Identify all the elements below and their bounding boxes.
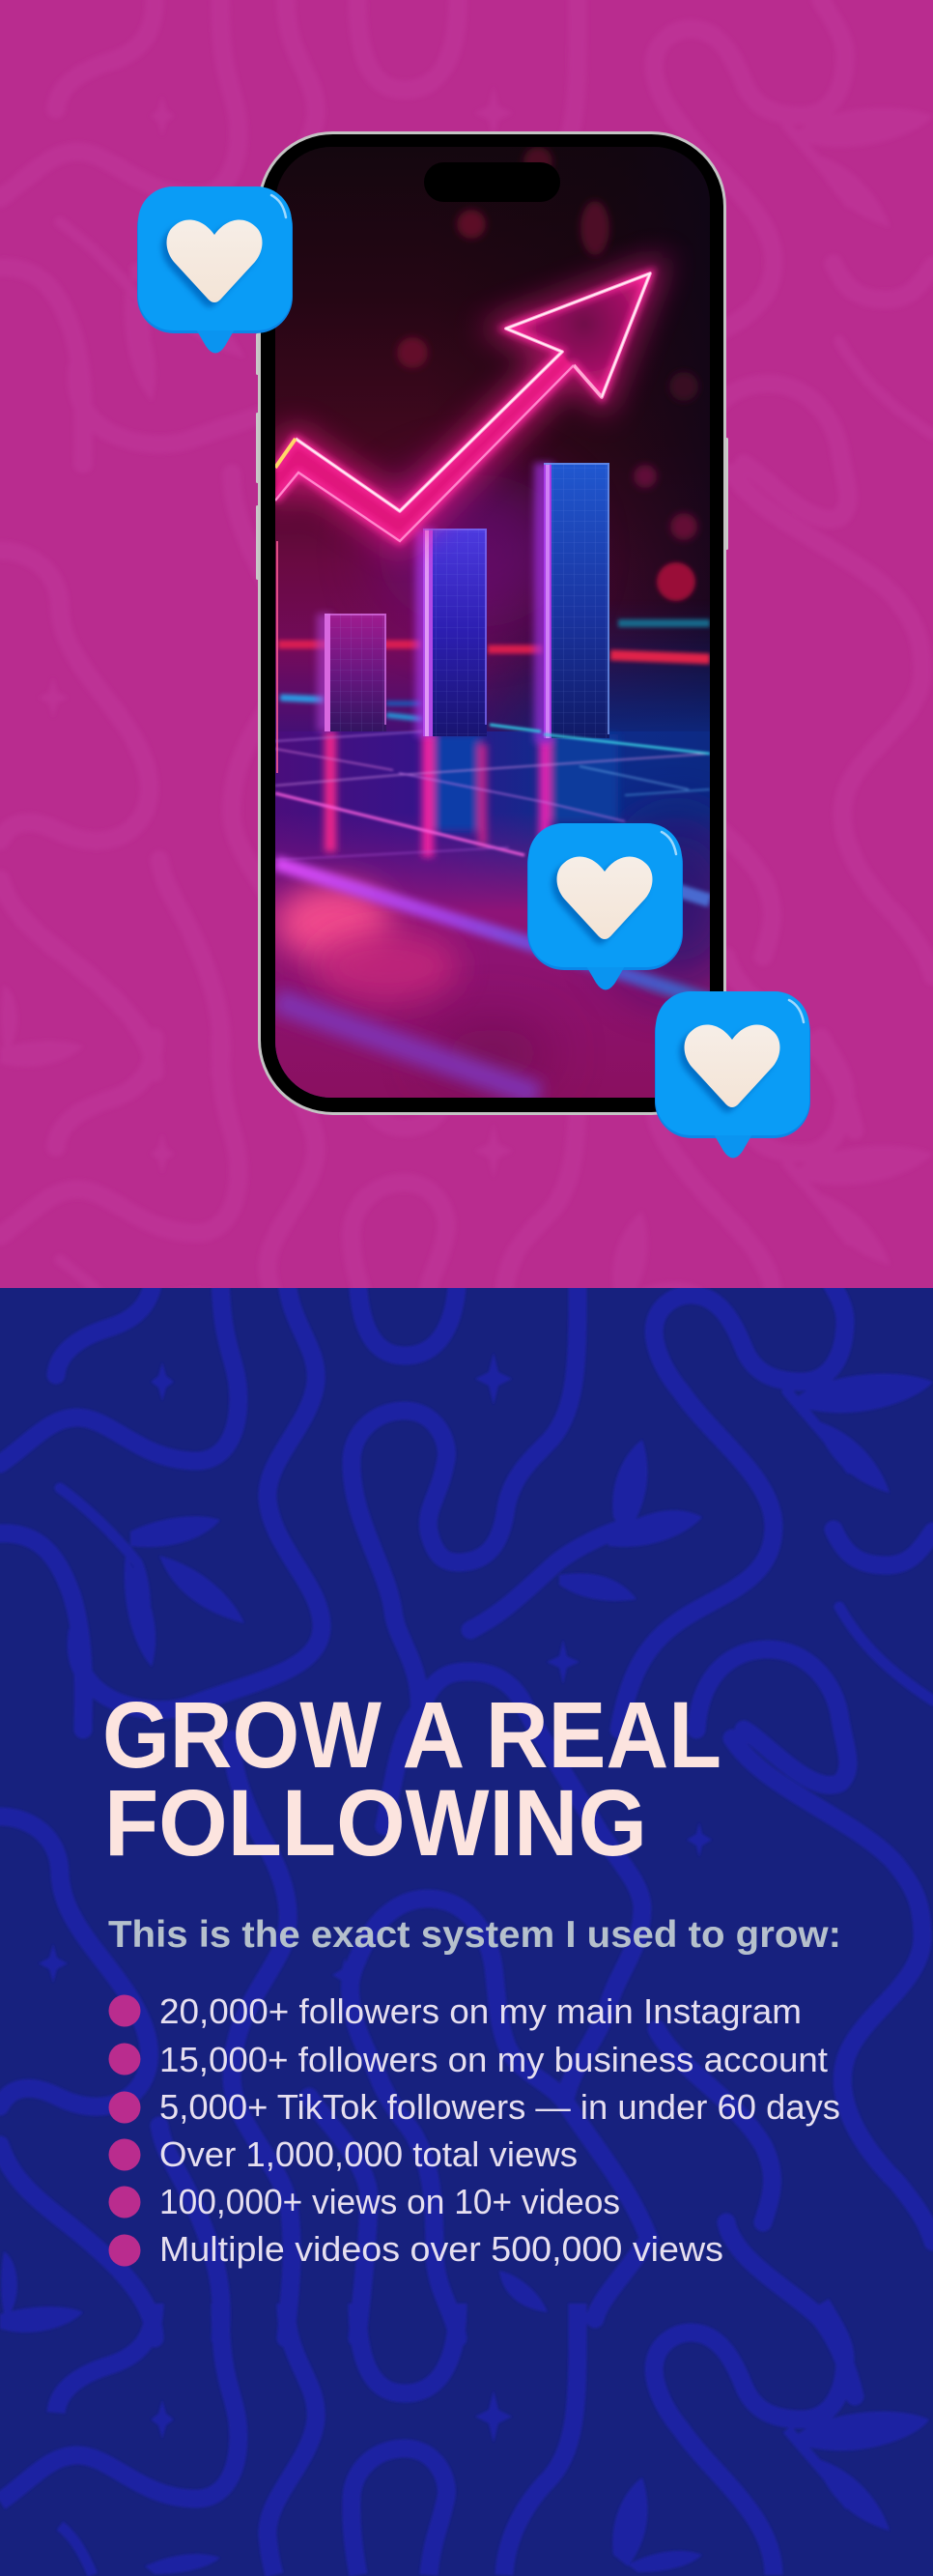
title [102,1682,721,1875]
phone [256,133,744,1113]
floor beams [275,1000,539,1096]
like bubble top left [137,186,293,354]
bars [317,463,609,743]
list item 3: 5,000+ TikTok followers — in under 60 days [159,2087,840,2127]
results list [108,1991,840,2269]
list item 1: 20,000+ followers on my main Instagram [159,1991,802,2031]
dynamic island [424,162,560,202]
panel: pink phone hero [0,0,933,1288]
title: GROW A REAL [102,1682,721,1788]
panel: navy text section [0,1266,933,2576]
neon arrow [275,273,650,541]
subheading: This is the exact system I used to grow: [108,1914,841,1956]
phone screen: neon growth chart [275,147,744,1098]
horizon lines [278,623,710,719]
floor [275,731,710,1098]
bar small [317,614,386,731]
like bubble lower middle [527,823,683,989]
phone body [259,133,724,1113]
pink floor blob [275,884,391,961]
bar tall [534,463,609,743]
floor reflections [325,731,618,857]
floor grid lines [275,725,710,860]
bar medium [415,529,487,736]
like bubble bottom right [655,991,810,1158]
list item 4: Over 1,000,000 total views [159,2134,578,2174]
phone side buttons [256,333,728,580]
glow behind bars [377,473,570,628]
title: FOLLOWING [104,1770,647,1875]
bokeh lights [397,147,698,540]
list item 2: 15,000+ followers on my business account [159,2040,828,2079]
list item 6: Multiple videos over 500,000 views [159,2229,723,2269]
list item 5: 100,000+ views on 10+ videos [159,2182,620,2221]
